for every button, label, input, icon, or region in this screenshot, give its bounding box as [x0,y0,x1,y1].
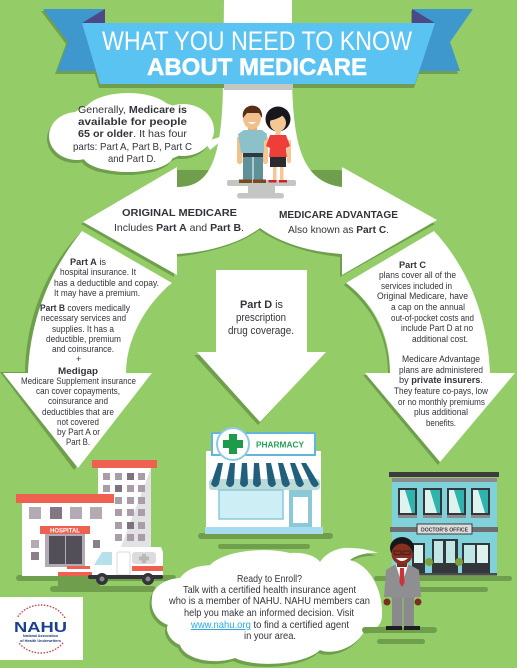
part a and b, medigap text: and coinsurance. [52,344,114,354]
part a and b, medigap text: Medigap [58,366,99,376]
bubble text: parts: Part A, Part B, Part C [73,141,192,153]
part d text: drug coverage. [228,325,294,337]
bubble text [168,573,370,642]
logo: NAHU: National Association [23,633,58,638]
logo: NAHU [0,597,83,660]
bubble text: and Part D. [108,153,156,165]
part a and b, medigap text: Medicare Supplement insurance [21,376,136,386]
part d text: Part D is [240,299,283,311]
bubble text: who is a member of NAHU. NAHU members can [168,595,370,607]
part c text: plans cover all of the [379,270,456,280]
label: original medicare: ORIGINAL MEDICARE [122,207,237,219]
bubble text: www.nahu.org to find a certified agent [190,619,349,631]
bubble text: Ready to Enroll? [237,573,302,585]
part c text: benefits. [426,418,456,428]
illustration: ambulance [88,547,163,585]
arrow: original medicare parts [0,231,172,470]
bubble text: help you make an informed decision. Visit [184,607,354,619]
part a and b, medigap text: by Part A or [57,427,100,437]
part a and b, medigap text: has a deductible and copay. [54,278,159,288]
part c text: a cap on the annual [391,302,465,312]
part a and b, medigap text: Part B. [66,437,90,447]
bubble text: Talk with a certified health insurance agent [183,584,356,596]
part c text [377,260,488,428]
speech bubble: who is eligible [47,93,231,175]
part c text: They feature co-pays, low [394,386,488,396]
part a and b, medigap text: deductible, premium [46,334,121,344]
part c text: out-of-pocket costs and [391,313,474,323]
part a and b, medigap text: It may have a premium. [54,288,140,298]
part d text [228,299,294,337]
man [237,106,268,183]
part a and b, medigap text: deductibles that are [42,407,114,417]
speech bubble: ready to enroll [150,548,382,667]
part c text: Part C [399,260,427,270]
part c text: by private insurers. [399,375,483,385]
title line 1: WHAT YOU NEED TO KNOW [102,26,412,56]
bubble text: Generally, Medicare is [78,104,187,116]
part a and b, medigap text: not covered [57,417,99,427]
label: original medicare: Includes Part A and Part B. [114,222,244,234]
illustration: hospital: HOSPITAL [50,528,80,534]
part a and b, medigap text: coinsurance and [48,396,108,406]
bubble text: in your area. [244,630,296,642]
part c text: additional cost. [412,334,468,344]
part a and b, medigap text: Part B covers medically [40,303,130,313]
part c text: Medicare Advantage [402,354,480,364]
title line 2: ABOUT MEDICARE [147,54,367,81]
part a and b, medigap text: supplies. It has a [52,324,114,334]
part a and b, medigap text: Part A is [70,257,107,267]
part a and b, medigap text: + [76,354,81,364]
bubble text: available for people [78,116,187,128]
part a and b, medigap text: hospital insurance. It [60,267,136,277]
part d text: prescription [236,312,286,324]
illustration: doctor's office [374,472,512,592]
illustration: agent in suit [362,537,437,644]
banner: title ribbon [41,9,473,90]
illustration: doctor's office: DOCTOR'S OFFICE [421,528,468,534]
label: medicare advantage: Also known as Part C. [288,224,389,236]
part a and b, medigap text: necessary services and [41,313,126,323]
illustration: pharmacy: PHARMACY [256,440,305,450]
label: original medicare [114,207,244,234]
woman [264,106,291,182]
bubble text: 65 or older. It has four [78,128,188,140]
part c text: plans are administered [399,365,483,375]
part c text: plus additional [414,407,468,417]
part a and b, medigap text: can cover copayments, [36,386,120,396]
label: medicare advantage: MEDICARE ADVANTAGE [279,209,398,221]
illustration: pharmacy [198,428,333,549]
part c text: include Part D at no [401,323,473,333]
bubble text [73,104,192,165]
logo: NAHU: of Health Underwriters [20,638,62,643]
arrow: medicare advantage details [344,231,515,465]
part c text: Original Medicare, have [377,291,468,301]
couple on platform [227,106,296,198]
part a and b, medigap text [21,257,159,447]
logo: NAHU: NAHU [14,619,67,636]
label: medicare advantage [279,209,398,236]
part c text: or no monthly premiums [398,397,485,407]
part c text: services included in [381,281,452,291]
white path: stem and two branching arrows [81,0,437,277]
illustration: hospital [16,460,176,592]
arrow: part d [194,270,326,425]
